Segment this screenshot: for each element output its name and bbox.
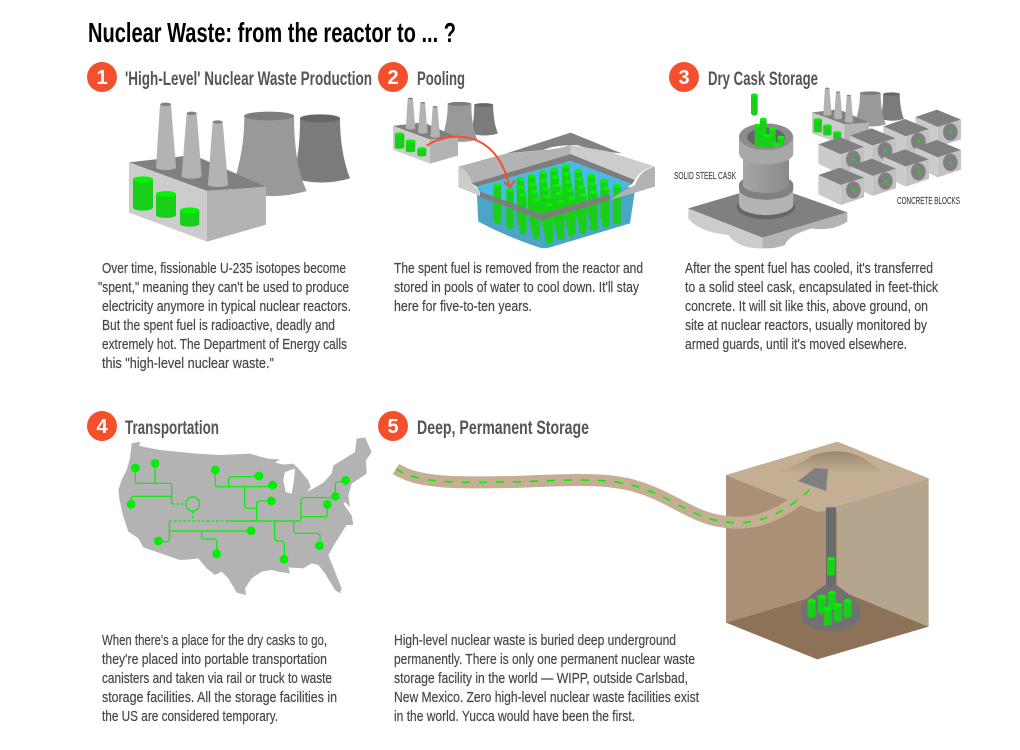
panel: step 1 high-level nuclear waste production xyxy=(87,62,372,372)
illustration: solid steel cask xyxy=(688,93,847,248)
step 5 number badge xyxy=(378,411,408,441)
step 1 heading: 'High-Level' Nuclear Waste Production xyxy=(125,69,372,90)
panel: step 3 dry cask storage xyxy=(669,62,961,353)
step 1 text block: this "high-level nuclear waste." xyxy=(102,355,274,372)
step 4 text block: the US are considered temporary. xyxy=(102,708,278,725)
step 4 number badge: 4 xyxy=(96,416,108,438)
panel: step 4 transportation xyxy=(87,411,372,725)
step 3 text block: After the spent fuel has cooled, it's transferred xyxy=(685,260,933,277)
step 5 text block: permanently. There is only one permanent nuclear waste xyxy=(394,651,695,668)
illustration: underground repository cross-section xyxy=(726,442,929,659)
step 1 text block: extremely hot. The Department of Energy calls xyxy=(102,336,347,353)
label: concrete blocks: CONCRETE BLOCKS xyxy=(897,196,960,207)
panel: step 2 pooling xyxy=(378,62,655,315)
icon: small reactor xyxy=(812,88,904,145)
illustration: concrete blocks xyxy=(818,110,961,205)
icon: reactor with cooling towers xyxy=(129,103,350,242)
illustration: cooling pool with fuel rods xyxy=(427,133,655,248)
step 1 number badge xyxy=(87,62,117,92)
step 4 number badge xyxy=(87,411,117,441)
icon: small reactor xyxy=(393,98,498,164)
step 5 heading: Deep, Permanent Storage xyxy=(417,418,589,439)
step 3 text block xyxy=(685,260,938,353)
step 5 text block: storage facility in the world — WIPP, outside Carlsbad, xyxy=(394,670,688,687)
step 1 text block: But the spent fuel is radioactive, deadly and xyxy=(102,317,335,334)
step 4 text block: storage facilities. All the storage facilities in xyxy=(102,689,337,706)
step 2 heading: Pooling xyxy=(417,69,465,90)
step 2 text block xyxy=(394,260,643,315)
dashed route line xyxy=(396,469,812,523)
step 3 number badge xyxy=(669,62,699,92)
tunnel entrance xyxy=(798,468,828,491)
step 3 text block: to a solid steel cask, encapsulated in feet-thick xyxy=(685,279,938,296)
step 5 text block: in the world. Yucca would have been the first. xyxy=(394,708,635,725)
step 5 number badge: 5 xyxy=(387,416,399,438)
step 2 text block: here for five-to-ten years. xyxy=(394,298,532,315)
step 4 text block: canisters and taken via rail or truck to waste xyxy=(102,670,332,687)
step 5 text block: New Mexico. Zero high-level nuclear waste facilities exist xyxy=(394,689,700,706)
step 3 text block: armed guards, until it's moved elsewhere. xyxy=(685,336,907,353)
step 1 text block: Over time, fissionable U-235 isotopes become xyxy=(102,260,346,277)
step 1 text block: "spent," meaning they can't be used to produce xyxy=(98,279,349,296)
step 1 text block xyxy=(98,260,351,372)
label: solid steel cask: SOLID STEEL CASK xyxy=(674,171,736,182)
step 5 text block: High-level nuclear waste is buried deep underground xyxy=(394,632,676,649)
step 3 text block: concrete. It will sit like this, above ground, on xyxy=(685,298,928,315)
step 2 number badge: 2 xyxy=(387,67,399,89)
step 2 text block: stored in pools of water to cool down. It'll stay xyxy=(394,279,639,296)
map: United States with transport routes xyxy=(118,437,372,595)
panel: step 5 deep permanent storage xyxy=(378,411,929,725)
title: Nuclear Waste: from the reactor to ... ? xyxy=(88,17,456,48)
step 5 text block xyxy=(394,632,700,725)
step 2 number badge xyxy=(378,62,408,92)
step 3 heading: Dry Cask Storage xyxy=(708,69,818,90)
step 4 text block xyxy=(102,632,337,725)
step 1 text block: electricity anymore in typical nuclear reactors. xyxy=(102,298,351,315)
step 4 text block: they're placed into portable transportation xyxy=(102,651,327,668)
step 4 text block: When there's a place for the dry casks to go, xyxy=(102,632,327,649)
step 3 number badge: 3 xyxy=(678,67,690,89)
step 1 number badge: 1 xyxy=(96,67,108,89)
step 3 text block: site at nuclear reactors, usually monitored by xyxy=(685,317,927,334)
step 2 text block: The spent fuel is removed from the reactor and xyxy=(394,260,643,277)
step 4 heading: Transportation xyxy=(125,418,219,439)
road to repository xyxy=(396,469,812,523)
